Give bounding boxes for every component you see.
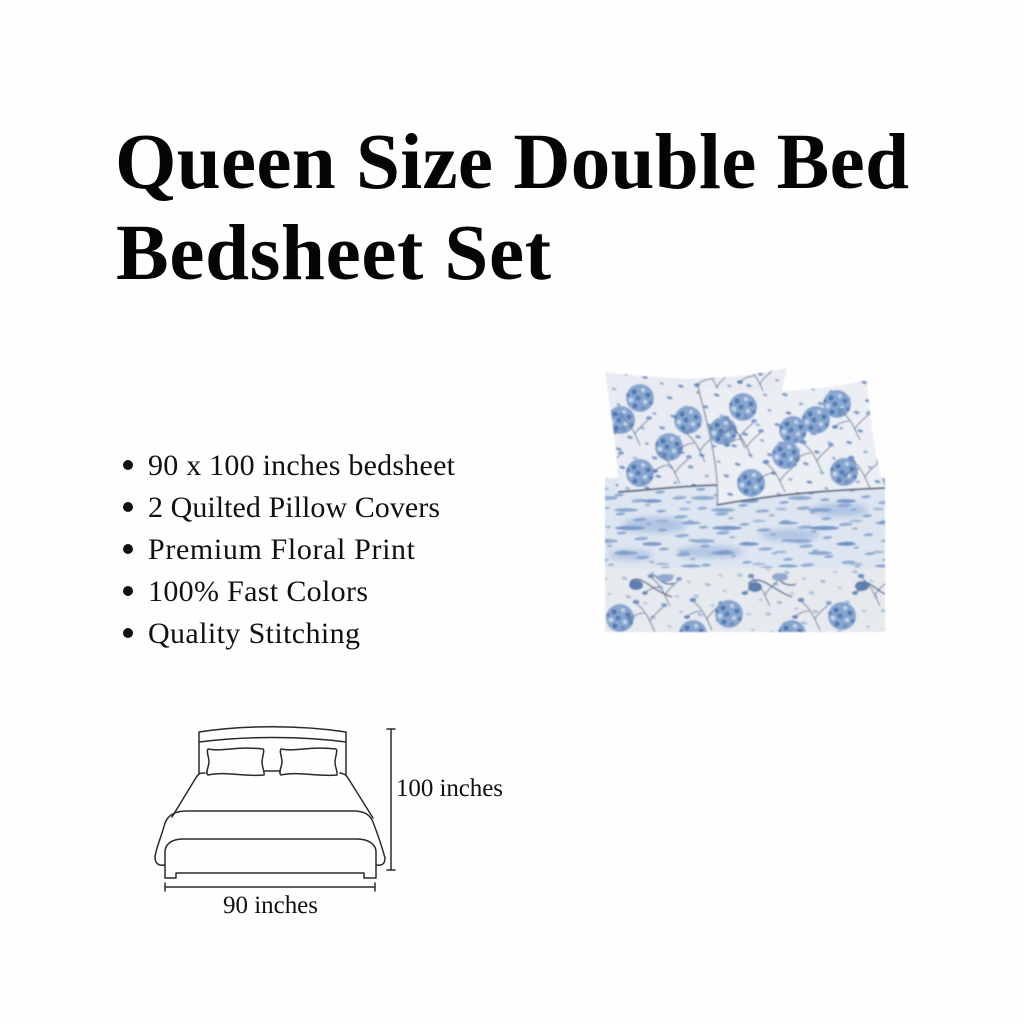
title: [115, 119, 909, 297]
bullet: stitching: Quality Stitching: [148, 617, 360, 650]
feature list: [123, 449, 456, 650]
icon: left pillow: [207, 748, 264, 775]
title: Queen Size Double Bed: [115, 119, 909, 206]
icon: right pillow: [280, 748, 337, 775]
width dimension line: [165, 883, 375, 891]
front pillow: [708, 380, 884, 504]
label: 100 inches: 100 inches: [396, 775, 503, 802]
title: Bedsheet Set: [116, 210, 551, 297]
icon: headboard: [199, 727, 346, 774]
label: 90 inches: 90 inches: [223, 892, 318, 919]
back pillow: [605, 368, 787, 491]
icon: mattress and blanket: [155, 773, 385, 878]
bullet: bedsheet size: 90 x 100 inches bedsheet: [148, 449, 456, 482]
bullet: fast colors: 100% Fast Colors: [148, 575, 368, 608]
bed sheet top: [605, 478, 885, 570]
bullet: floral print: Premium Floral Print: [148, 533, 416, 566]
sheet front drop: [604, 567, 886, 633]
bed dimension diagram: [155, 727, 395, 891]
height dimension line: [387, 729, 395, 870]
bullet: pillow covers: 2 Quilted Pillow Covers: [148, 491, 440, 524]
product photo: floral bedsheet set: [604, 368, 886, 633]
